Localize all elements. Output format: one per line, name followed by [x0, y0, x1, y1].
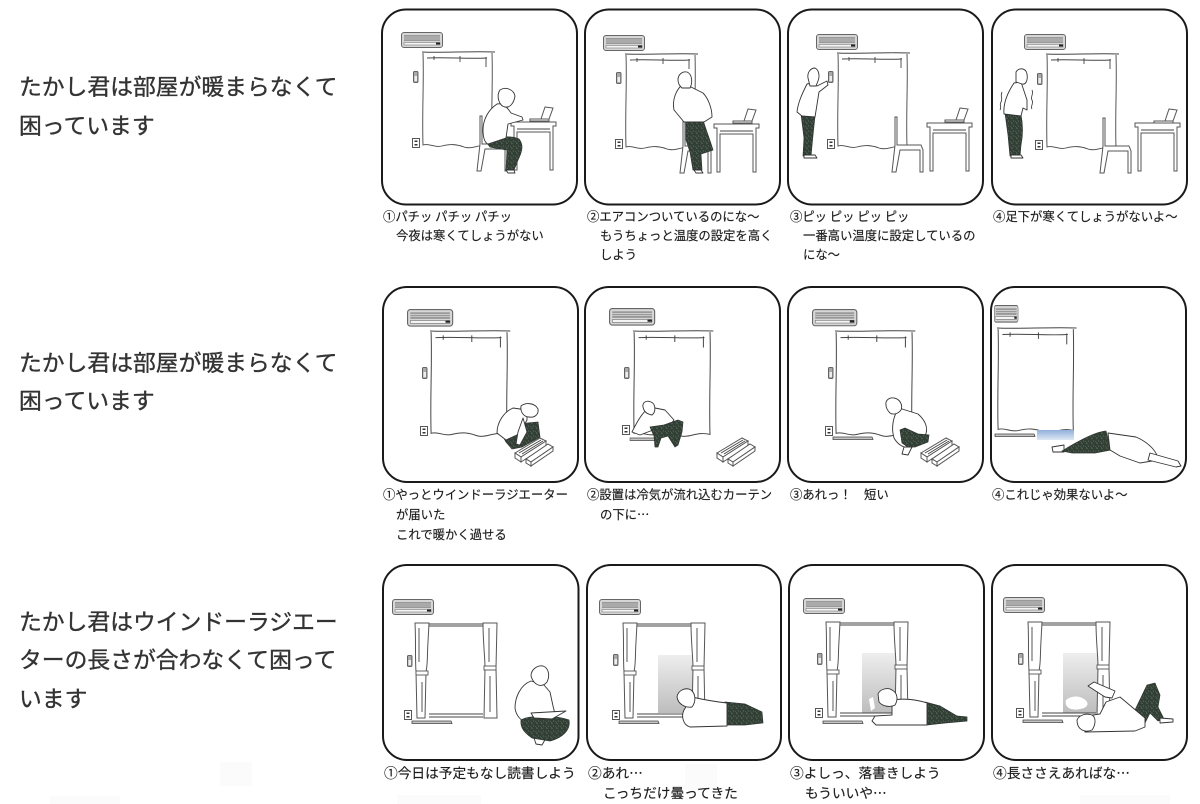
remote control — [828, 368, 833, 378]
curtain — [633, 331, 713, 436]
radiator — [1023, 720, 1063, 722]
panel: row 1 scene 3 — [788, 10, 983, 204]
outlet — [412, 138, 420, 148]
cold draft gap — [1037, 430, 1074, 440]
outlet — [420, 426, 428, 436]
icon: air conditioner — [816, 34, 858, 50]
remote control — [624, 368, 629, 378]
person installing radiator — [632, 401, 683, 447]
chair — [1100, 118, 1131, 173]
outlet — [816, 708, 822, 718]
icon: air conditioner — [610, 309, 655, 325]
person typing at desk — [483, 88, 523, 173]
desk and laptop — [1135, 109, 1180, 171]
fogged window area — [1063, 653, 1098, 713]
icon: air conditioner — [804, 598, 844, 614]
icon: air conditioner — [600, 600, 640, 614]
person reading on floor — [515, 666, 569, 745]
person on back reading upward — [1077, 682, 1173, 732]
caption: row 1 scene 2: もうちょっと温度の設定を高く — [600, 226, 772, 244]
caption: row 2 scene 1: が届いた — [396, 505, 445, 523]
curtain — [625, 54, 698, 150]
radiator on floor — [630, 438, 658, 440]
curtain — [422, 52, 495, 148]
caption: row 1 scene 1: 今夜は寒くてしょうがない — [396, 226, 544, 244]
fogged window area — [862, 653, 897, 713]
person shivering — [1000, 69, 1033, 158]
panel: row 3 scene 4 — [992, 565, 1187, 760]
chair — [892, 117, 923, 172]
heading: row 1: たかし君は部屋が暖まらなくて — [19, 69, 337, 102]
caption: row 3 scene 3: ③よしっ、落書きしよう — [790, 762, 941, 782]
caption: row 2 scene 2: の下に… — [600, 505, 649, 523]
outlet — [826, 426, 832, 436]
caption: row 3 scene 1: ①今日は予定もなし読書しよう — [384, 762, 576, 782]
heading: row 3: います — [19, 681, 87, 714]
curtain — [430, 331, 510, 436]
faint scan show-through — [50, 762, 1170, 804]
scribble on glass — [1066, 696, 1087, 710]
heading: row 3: ターの長さが合わなくて困って — [19, 642, 336, 675]
panel: row 3 scene 3 — [789, 565, 984, 760]
remote control — [828, 72, 833, 82]
window with curtains — [623, 623, 705, 718]
remote control — [408, 656, 412, 666]
caption: row 2 scene 3: ③あれっ！ 短い — [790, 485, 889, 503]
caption: row 1 scene 2: ②エアコンついているのにな～ — [587, 207, 759, 225]
icon: air conditioner — [392, 600, 434, 614]
caption: row 3 scene 2: こっちだけ曇ってきた — [603, 782, 738, 802]
window with curtains — [826, 622, 908, 717]
caption: row 1 scene 3: 一番高い温度に設定しているの — [803, 226, 975, 244]
person scribbling on window — [872, 689, 967, 725]
outlet — [622, 426, 630, 434]
panel: row 3 scene 2 — [587, 565, 781, 760]
window radiator boxes — [717, 438, 755, 466]
curtain — [1046, 54, 1119, 150]
panel: row 2 scene 3 — [788, 287, 983, 482]
remote control — [616, 72, 621, 84]
heading: row 1: 困っています — [19, 108, 155, 141]
outlet — [1036, 140, 1042, 150]
radiator — [823, 721, 863, 724]
person lying on stomach — [677, 689, 763, 727]
caption: row 1 scene 1: ①パチッ パチッ パチッ — [383, 207, 512, 225]
curtain — [837, 53, 910, 149]
caption: row 1 scene 3: にな～ — [803, 245, 840, 263]
person unpacking radiator — [497, 404, 540, 449]
desk and laptop — [511, 107, 556, 170]
panel: row 1 scene 2 — [585, 10, 780, 204]
curtain — [997, 328, 1077, 432]
heading: row 2: たかし君は部屋が暖まらなくて — [19, 345, 337, 378]
caption: row 2 scene 1: ①やっとウインドーラジエーター — [383, 485, 568, 503]
curtain — [835, 331, 915, 436]
window radiator boxes — [921, 438, 959, 466]
icon: air conditioner — [1024, 34, 1066, 50]
person rising from chair — [673, 72, 713, 173]
caption: row 2 scene 2: ②設置は冷気が流れ込むカーテン — [587, 485, 772, 503]
icon: air conditioner — [408, 310, 453, 326]
person pressing remote — [797, 68, 828, 158]
shiver marks — [1000, 90, 1033, 110]
window with curtains — [1028, 622, 1110, 717]
remote control — [414, 72, 418, 82]
icon: air conditioner — [604, 36, 644, 50]
remote control — [1018, 654, 1023, 664]
desk and laptop — [714, 109, 759, 172]
outlet — [404, 710, 412, 720]
remote control — [818, 654, 822, 664]
remote control — [422, 368, 427, 378]
desk and laptop — [927, 108, 972, 171]
panel: row 3 scene 1 — [383, 565, 578, 760]
outlet — [612, 710, 620, 720]
icon: air conditioner — [402, 32, 442, 48]
panel: row 2 scene 1 — [383, 287, 578, 482]
caption: row 3 scene 3: もういいや… — [805, 782, 887, 802]
remote control — [614, 654, 618, 666]
radiator — [412, 721, 452, 724]
radiator on floor — [995, 434, 1035, 436]
caption: row 3 scene 4: ④長ささえあればな… — [993, 762, 1130, 782]
caption: row 3 scene 2: ②あれ… — [588, 762, 643, 782]
icon: air conditioner — [813, 310, 857, 326]
chair — [680, 118, 711, 173]
remote control — [1038, 74, 1042, 84]
heading: row 2: 困っています — [19, 383, 155, 416]
outlet — [616, 140, 622, 148]
panel: row 2 scene 4 — [991, 287, 1186, 482]
caption: row 1 scene 2: しよう — [600, 245, 637, 263]
panel: row 2 scene 2 — [585, 287, 780, 482]
person crouching — [886, 398, 929, 455]
heading: row 3: たかし君はウインドーラジエー — [19, 604, 338, 637]
panel: row 1 scene 4 — [992, 10, 1187, 204]
panel: row 1 scene 1 — [382, 10, 577, 204]
scribble on glass — [869, 697, 875, 711]
person lying down — [1052, 431, 1181, 467]
radiator — [619, 721, 659, 724]
window with curtains — [415, 623, 497, 718]
icon: air conditioner — [994, 306, 1018, 322]
short radiator on floor — [833, 437, 873, 440]
outlet — [828, 140, 834, 148]
window radiator boxes — [515, 438, 553, 466]
caption: row 2 scene 1: これで暖かく過せる — [396, 525, 507, 543]
caption: row 1 scene 4: ④足下が寒くてしょうがないよ～ — [993, 207, 1178, 225]
fogged window area — [658, 655, 693, 713]
chair — [477, 116, 508, 171]
caption: row 2 scene 4: ④これじゃ効果ないよ～ — [992, 485, 1128, 503]
caption: row 1 scene 3: ③ピッ ピッ ピッ ピッ — [790, 207, 909, 225]
icon: air conditioner — [1004, 598, 1044, 612]
outlet — [1016, 708, 1024, 718]
